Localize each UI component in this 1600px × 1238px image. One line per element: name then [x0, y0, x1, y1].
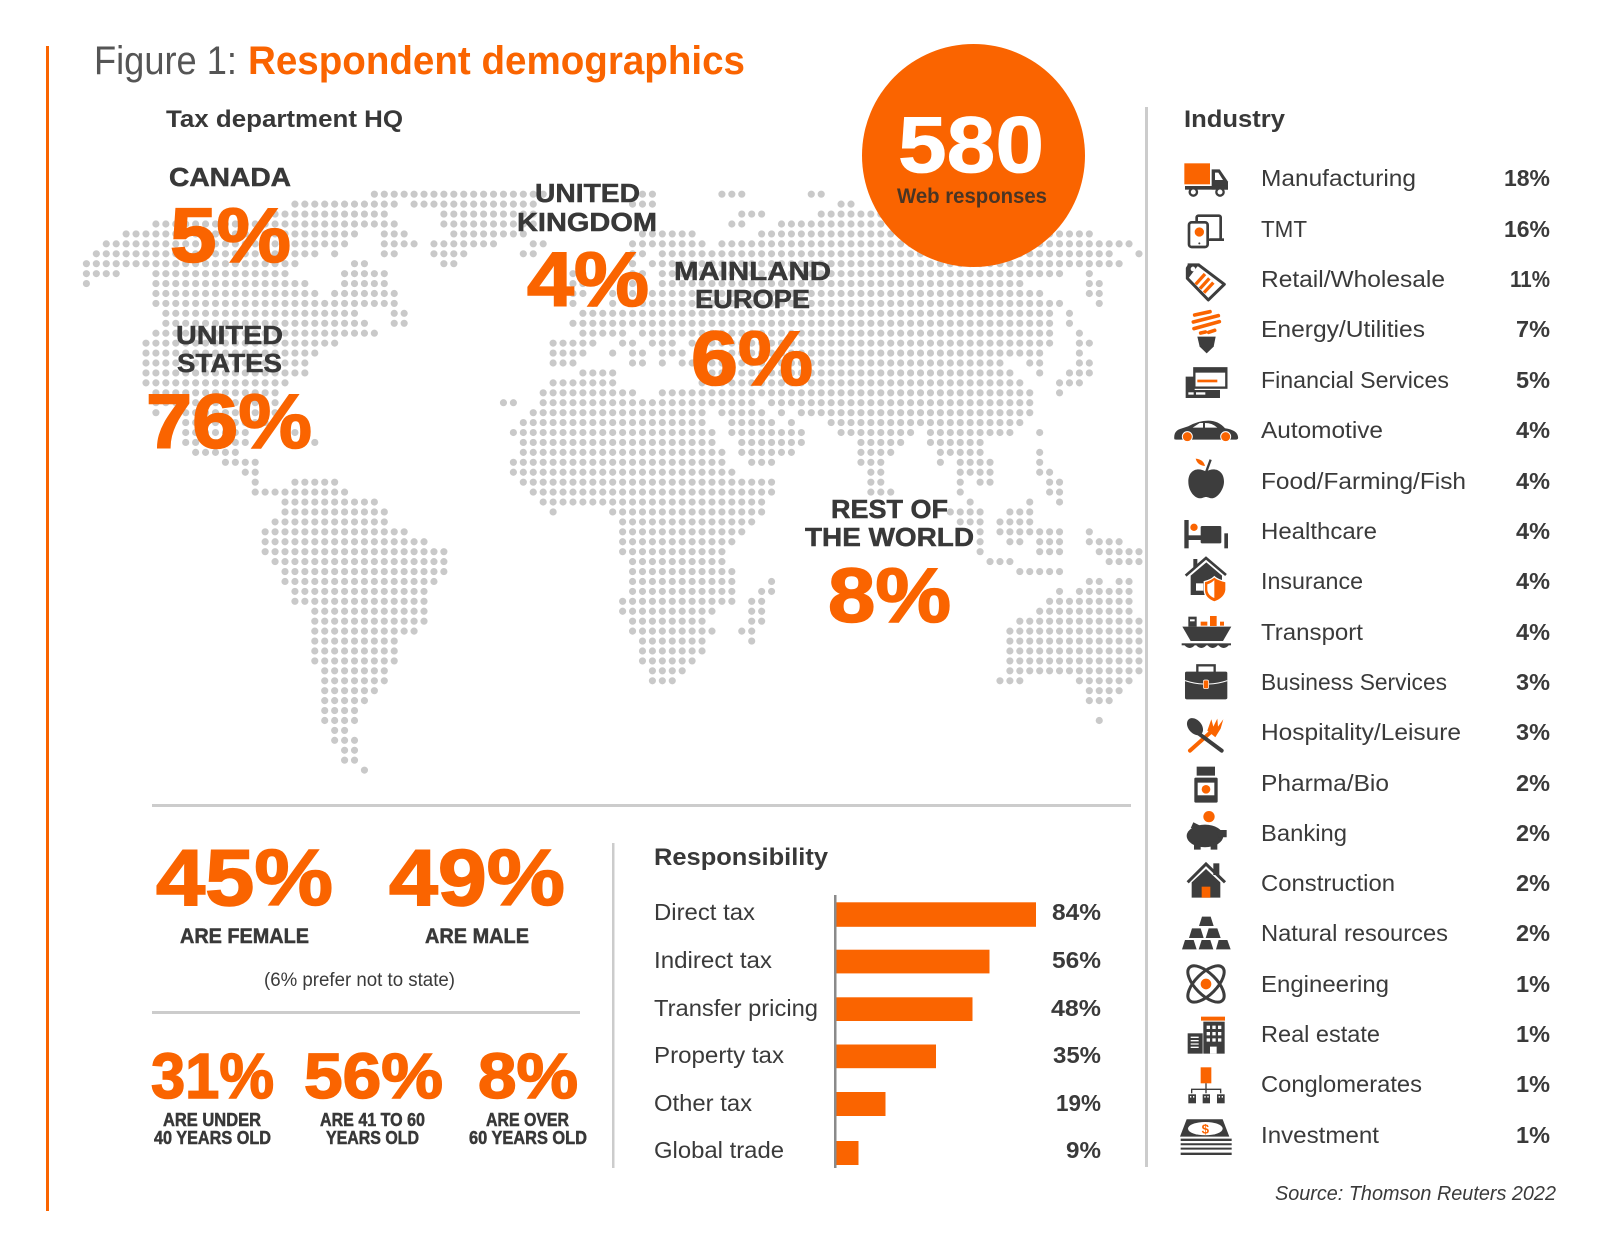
- age stats: ARE 41 TO 60: [320, 1110, 425, 1130]
- icon: buildings: [1188, 1017, 1225, 1054]
- accent bar: [46, 46, 49, 1211]
- icon: car: [1174, 421, 1238, 442]
- heading: industry: Industry: [1184, 106, 1286, 133]
- callout: United States: 76%: [146, 379, 312, 465]
- industry row: construction: 2%: [1516, 870, 1550, 896]
- industry row: TMT: [1189, 216, 1550, 247]
- callout: Rest of the world: THE WORLD: [805, 522, 974, 552]
- callout: United Kingdom: UNITED: [535, 178, 640, 208]
- industry row: healthcare: 4%: [1516, 518, 1550, 544]
- bar chart: responsibility: 48%: [1051, 995, 1101, 1021]
- industry row: manufacturing: Manufacturing: [1261, 165, 1416, 191]
- callout: Rest of the world: REST OF: [831, 494, 948, 524]
- age stats: ARE OVER: [486, 1110, 569, 1130]
- age stats: YEARS OLD: [326, 1128, 419, 1148]
- industry row: transport: [1182, 616, 1550, 648]
- industry row: automotive: 4%: [1516, 417, 1550, 443]
- icon: spoon and fork: [1184, 715, 1223, 751]
- industry row: food/farming/fish: Food/Farming/Fish: [1261, 468, 1466, 494]
- industry row: retail/wholesale: [1187, 263, 1550, 300]
- title: Respondent demographics: [248, 39, 745, 83]
- bar chart: responsibility: Property tax: [654, 1042, 785, 1068]
- callout: Mainland Europe: MAINLAND: [674, 256, 831, 286]
- industry row: natural resources: 2%: [1516, 920, 1550, 946]
- icon: piggy bank: [1187, 811, 1227, 850]
- badge: 580 web responses: Web responses: [897, 185, 1047, 208]
- icon: pill bottle: [1194, 767, 1218, 803]
- bar chart: responsibility: Direct tax: [654, 899, 756, 925]
- source note: Source: Thomson Reuters 2022: [1275, 1183, 1556, 1205]
- industry row: engineering: 1%: [1516, 971, 1550, 997]
- gender stats: [156, 833, 565, 991]
- industry row: conglomerates: Conglomerates: [1261, 1071, 1422, 1097]
- callout: Mainland Europe: EUROPE: [695, 284, 810, 314]
- gender stats: ARE FEMALE: [180, 925, 309, 948]
- bar chart: responsibility: Other tax: [654, 1090, 753, 1116]
- dotted world map: [86, 194, 1139, 770]
- industry row: pharma/bio: [1194, 767, 1550, 803]
- icon: apple: [1188, 459, 1224, 498]
- icon: briefcase: [1185, 665, 1227, 699]
- industry row: food/farming/fish: 4%: [1516, 468, 1550, 494]
- age stats: [151, 1040, 587, 1148]
- icon: stack of banknotes: $: [1202, 1121, 1210, 1136]
- badge: 580 web responses: [862, 44, 1085, 267]
- industry row: hospitality/leisure: 3%: [1516, 719, 1550, 745]
- bar chart: responsibility: 56%: [1052, 947, 1101, 973]
- industry row: natural resources: [1182, 917, 1550, 949]
- icon: atom: [1182, 960, 1230, 1008]
- gender stats: 45%: [156, 833, 333, 922]
- bar chart: responsibility: Indirect tax: [654, 947, 773, 973]
- icon: org buildings: [1188, 1067, 1225, 1103]
- bar chart: responsibility: [654, 895, 1101, 1168]
- badge: 580 web responses: 580: [898, 100, 1044, 189]
- heading: tax department HQ: Tax department HQ: [166, 106, 403, 133]
- bar chart: responsibility: 9%: [1066, 1137, 1101, 1163]
- icon: delivery truck: [1184, 163, 1228, 196]
- callout: United Kingdom: KINGDOM: [517, 207, 657, 237]
- bar chart: responsibility: 84%: [1052, 899, 1101, 925]
- callout: Rest of the world: 8%: [828, 553, 951, 639]
- industry row: pharma/bio: 2%: [1516, 770, 1550, 796]
- industry row: financial services: Financial Services: [1261, 367, 1449, 393]
- industry row: financial services: 5%: [1516, 367, 1550, 393]
- age stats: 56%: [304, 1040, 443, 1112]
- industry row: automotive: Automotive: [1261, 417, 1383, 443]
- industry row: engineering: Engineering: [1261, 971, 1389, 997]
- callout: Canada: CANADA: [169, 162, 291, 192]
- industry row: investment: [1180, 1119, 1550, 1155]
- industry row: insurance: [1186, 558, 1550, 602]
- industry row: business services: [1185, 665, 1550, 699]
- industry row: hospitality/leisure: Hospitality/Leisure: [1261, 719, 1461, 745]
- icon: card and terminal: [1186, 368, 1226, 398]
- callout: Mainland Europe: 6%: [691, 316, 813, 402]
- callout: Mainland Europe: [674, 256, 831, 402]
- industry row: TMT: 16%: [1504, 216, 1550, 242]
- bar chart: responsibility: Transfer pricing: [654, 995, 818, 1021]
- industry row: hospitality/leisure: [1184, 715, 1550, 751]
- industry row: real estate: Real estate: [1261, 1021, 1380, 1047]
- bar chart: responsibility: 19%: [1056, 1090, 1101, 1116]
- gender stats: 49%: [389, 833, 565, 922]
- age stats: 31%: [151, 1040, 274, 1112]
- industry row: healthcare: Healthcare: [1261, 518, 1377, 544]
- callout: United Kingdom: 4%: [527, 237, 649, 323]
- callout: Rest of the world: [805, 494, 974, 639]
- callout: Canada: [169, 162, 291, 279]
- icon: house: [1188, 863, 1225, 898]
- callout: Canada: 5%: [170, 193, 291, 279]
- industry row: natural resources: Natural resources: [1261, 920, 1448, 946]
- icon: cargo ship: [1182, 616, 1231, 648]
- industry row: manufacturing: [1184, 163, 1550, 196]
- industry row: business services: Business Services: [1261, 669, 1447, 695]
- industry row: TMT: TMT: [1261, 216, 1307, 242]
- industry row: engineering: [1182, 960, 1550, 1008]
- industry row: transport: Transport: [1261, 619, 1364, 645]
- industry row: energy/utilities: 7%: [1516, 316, 1550, 342]
- bar chart: responsibility: 35%: [1053, 1042, 1101, 1068]
- icon: stack of banknotes: [1180, 1119, 1232, 1155]
- industry row: banking: Banking: [1261, 820, 1347, 846]
- icon: gold bars: [1182, 917, 1231, 949]
- industry row: retail/wholesale: 11%: [1510, 266, 1550, 292]
- industry row: banking: 2%: [1516, 820, 1550, 846]
- gender stats: (6% prefer not to state): [264, 970, 455, 991]
- callout: United Kingdom: [517, 178, 657, 323]
- industry row: construction: Construction: [1261, 870, 1395, 896]
- industry row: conglomerates: 1%: [1516, 1071, 1550, 1097]
- industry row: construction: [1188, 863, 1550, 898]
- industry row: financial services: [1186, 367, 1550, 398]
- gender stats: ARE MALE: [425, 925, 529, 948]
- industry row: energy/utilities: [1193, 312, 1550, 353]
- callout: United States: UNITED: [176, 320, 283, 350]
- age stats: 40 YEARS OLD: [154, 1128, 271, 1148]
- age stats: 60 YEARS OLD: [469, 1128, 587, 1148]
- age stats: 8%: [478, 1040, 578, 1112]
- industry row: retail/wholesale: Retail/Wholesale: [1261, 266, 1445, 292]
- heading: responsibility: Responsibility: [654, 844, 829, 871]
- bar chart: responsibility: Global trade: [654, 1137, 784, 1163]
- industry row: insurance: 4%: [1516, 568, 1550, 594]
- industry row: conglomerates: [1188, 1067, 1550, 1103]
- industry row: investment: 1%: [1516, 1122, 1550, 1148]
- callout: United States: [146, 320, 312, 465]
- industry row: real estate: [1188, 1017, 1550, 1054]
- title: Figure 1:: [94, 39, 237, 83]
- industry row: pharma/bio: Pharma/Bio: [1261, 770, 1389, 796]
- icon: energy-saving bulb: [1193, 312, 1219, 353]
- icon: price tag: [1187, 263, 1224, 300]
- industry row: transport: 4%: [1516, 619, 1550, 645]
- icon: tablet and monitor: [1189, 216, 1224, 247]
- age stats: ARE UNDER: [163, 1110, 261, 1130]
- industry row: energy/utilities: Energy/Utilities: [1261, 316, 1425, 342]
- industry row: food/farming/fish: [1188, 459, 1550, 498]
- industry row: insurance: Insurance: [1261, 568, 1363, 594]
- icon: house with shield: [1186, 558, 1226, 602]
- industry row: investment: Investment: [1261, 1122, 1380, 1148]
- industry row: healthcare: [1184, 518, 1550, 548]
- callout: United States: STATES: [177, 348, 282, 378]
- industry row: banking: [1187, 811, 1550, 850]
- industry row: real estate: 1%: [1516, 1021, 1550, 1047]
- industry row: automotive: [1174, 417, 1550, 443]
- industry row: business services: 3%: [1516, 669, 1550, 695]
- industry row: manufacturing: 18%: [1504, 165, 1550, 191]
- icon: hospital bed: [1184, 520, 1228, 548]
